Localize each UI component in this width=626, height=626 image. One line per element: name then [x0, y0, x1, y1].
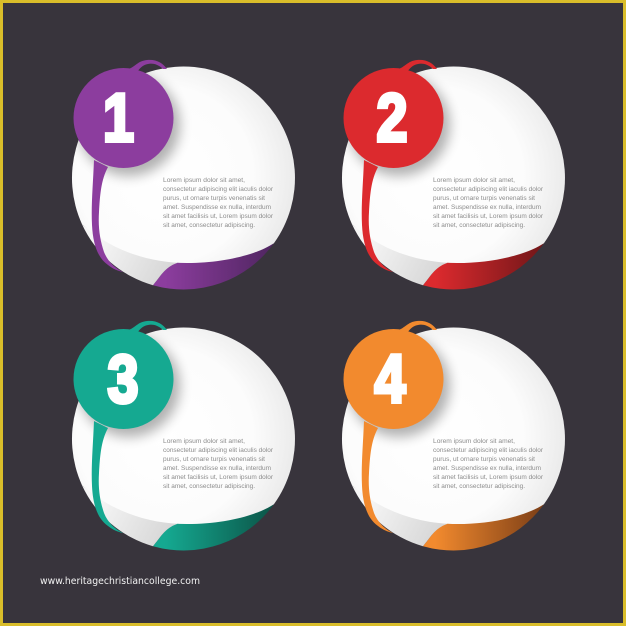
text block 4 [433, 438, 544, 490]
text block 1: purus, ut ornare turpis venenatis sit [163, 195, 265, 202]
text block 1: amet. Suspendisse ex nulla, interdum [163, 204, 271, 211]
watermark url: www.heritagechristiancollege.com [40, 576, 200, 587]
text block 2 [433, 177, 544, 229]
number 1: 1 [103, 81, 134, 156]
text block 2: consectetur adipiscing elit iaculis dolor [433, 186, 544, 193]
base flap: red [423, 243, 544, 289]
text block 3: Lorem ipsum dolor sit amet, [163, 438, 245, 445]
number 3: 3 [107, 342, 139, 417]
base flap: orange [423, 504, 544, 550]
panel: step 2 [342, 60, 565, 289]
white disc 4 [342, 327, 565, 546]
text block 1: consectetur adipiscing elit iaculis dolor [163, 186, 274, 193]
text block 1 [163, 177, 274, 229]
text block 3: sit amet facilisis ut, Lorem ipsum dolor [163, 474, 274, 481]
text block 3 [163, 438, 274, 490]
white disc 1 [72, 66, 295, 285]
text block 4: purus, ut ornare turpis venenatis sit [433, 456, 535, 463]
number 4: 4 [374, 342, 406, 417]
pin 4 [344, 321, 450, 533]
text block 1: sit amet facilisis ut, Lorem ipsum dolor [163, 213, 274, 220]
text block 2: Lorem ipsum dolor sit amet, [433, 177, 515, 184]
text block 2: purus, ut ornare turpis venenatis sit [433, 195, 535, 202]
panel: step 4 [342, 321, 565, 550]
text block 1: Lorem ipsum dolor sit amet, [163, 177, 245, 184]
text block 2: sit amet facilisis ut, Lorem ipsum dolor [433, 213, 544, 220]
text block 4: Lorem ipsum dolor sit amet, [433, 438, 515, 445]
text block 1: sit amet, consectetur adipiscing. [163, 222, 255, 229]
text block 4: amet. Suspendisse ex nulla, interdum [433, 465, 541, 472]
pin 3 [74, 321, 180, 533]
text block 3: sit amet, consectetur adipiscing. [163, 483, 255, 490]
text block 4: consectetur adipiscing elit iaculis dolor [433, 447, 544, 454]
base flap: teal [153, 504, 274, 550]
text block 3: amet. Suspendisse ex nulla, interdum [163, 465, 271, 472]
panel: step 1 [72, 60, 295, 289]
panel: step 3 [72, 321, 295, 550]
text block 4: sit amet, consectetur adipiscing. [433, 483, 525, 490]
text block 3: purus, ut ornare turpis venenatis sit [163, 456, 265, 463]
pin 1 [74, 60, 180, 272]
text block 3: consectetur adipiscing elit iaculis dolor [163, 447, 274, 454]
number 2: 2 [376, 81, 408, 156]
white disc 3 [72, 327, 295, 546]
base flap: purple [153, 243, 274, 289]
text block 2: amet. Suspendisse ex nulla, interdum [433, 204, 541, 211]
white disc 2 [342, 66, 565, 285]
text block 4: sit amet facilisis ut, Lorem ipsum dolor [433, 474, 544, 481]
text block 2: sit amet, consectetur adipiscing. [433, 222, 525, 229]
pin 2 [344, 60, 450, 272]
